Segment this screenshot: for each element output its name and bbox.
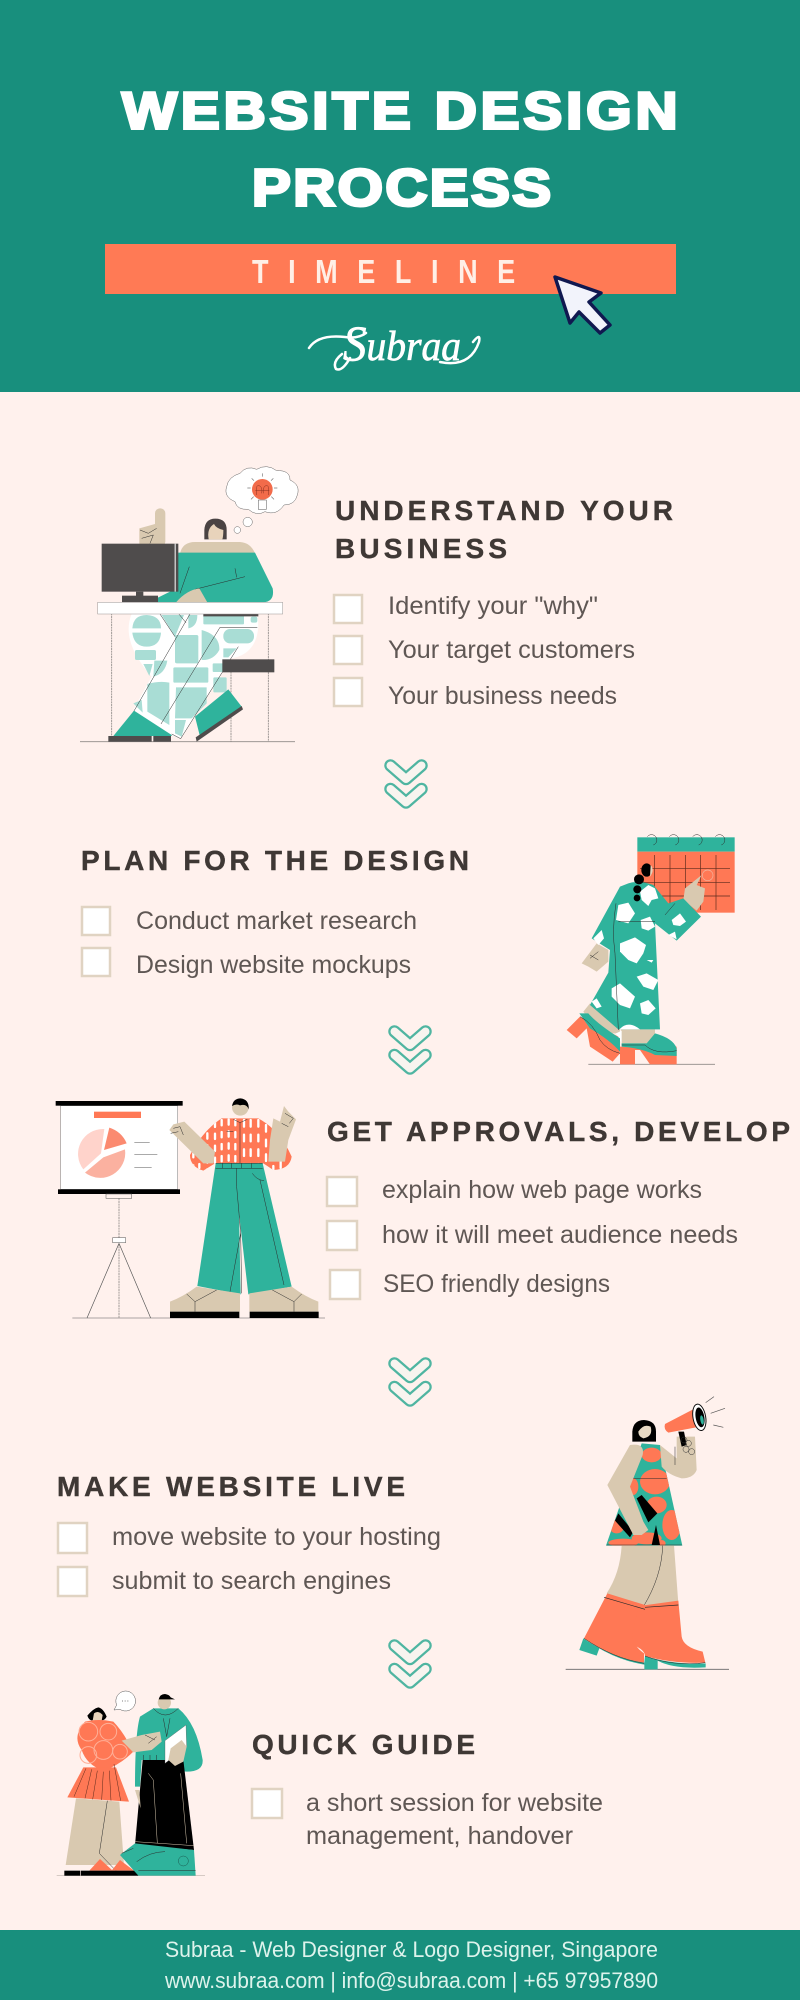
- step 4: make website live: [57, 1397, 729, 1669]
- checklist: Conduct market research: [136, 907, 417, 935]
- checklist: explain how web page works: [382, 1176, 702, 1204]
- footer: [0, 1930, 800, 2000]
- checklist: a short session for website: [306, 1789, 603, 1817]
- arrow: down chevrons: [394, 1032, 426, 1068]
- illustration: two people talking: [57, 1691, 205, 1876]
- illustration: woman with megaphone: [566, 1397, 729, 1669]
- checklist: [327, 1176, 738, 1299]
- arrow: down chevrons: [394, 1364, 426, 1400]
- heading: GET APPROVALS, DEVELOP: [327, 1116, 790, 1147]
- checklist: Design website mockups: [136, 951, 411, 979]
- illustration: woman at desk: [80, 467, 298, 742]
- checklist: [82, 907, 417, 979]
- subtitle banner: TIMELINE: [252, 255, 515, 291]
- illustration: man presenting: [56, 1098, 325, 1318]
- checklist: submit to search engines: [112, 1567, 391, 1595]
- arrow: down chevrons: [390, 766, 422, 802]
- subtitle banner: [105, 244, 676, 294]
- checklist: move website to your hosting: [112, 1523, 441, 1551]
- checklist: Your business needs: [388, 682, 617, 710]
- icon: mouse cursor: [555, 277, 610, 333]
- title: PROCESS: [252, 158, 551, 217]
- heading: [335, 495, 673, 564]
- checklist: management, handover: [306, 1822, 573, 1850]
- checklist: how it will meet audience needs: [382, 1221, 738, 1249]
- illustration: woman with calendar: [567, 835, 735, 1064]
- step 5: quick guide: [57, 1691, 603, 1876]
- arrow: down chevrons: [394, 1646, 426, 1682]
- heading: MAKE WEBSITE LIVE: [57, 1471, 405, 1502]
- footer: Subraa - Web Designer & Logo Designer, Singapore: [165, 1937, 658, 1962]
- footer: www.subraa.com | info@subraa.com | +65 97957890: [164, 1968, 658, 1993]
- step 3: get approvals, develop: [56, 1098, 790, 1318]
- step 1: understand your business: [80, 467, 673, 742]
- title: [122, 81, 678, 217]
- checklist: Identify your "why": [388, 592, 598, 620]
- step 2: plan for the design: [81, 835, 735, 1064]
- heading: UNDERSTAND YOUR: [335, 495, 673, 526]
- header panel: [0, 0, 800, 392]
- logo: Subraa: Subraa: [343, 315, 461, 371]
- checklist: [334, 592, 635, 710]
- heading: QUICK GUIDE: [252, 1729, 475, 1760]
- title: WEBSITE DESIGN: [122, 81, 678, 140]
- heading: PLAN FOR THE DESIGN: [81, 845, 469, 876]
- heading: BUSINESS: [335, 533, 507, 564]
- checklist: Your target customers: [388, 636, 635, 664]
- checklist: [252, 1789, 603, 1850]
- checklist: [58, 1523, 441, 1596]
- checklist: SEO friendly designs: [383, 1270, 610, 1298]
